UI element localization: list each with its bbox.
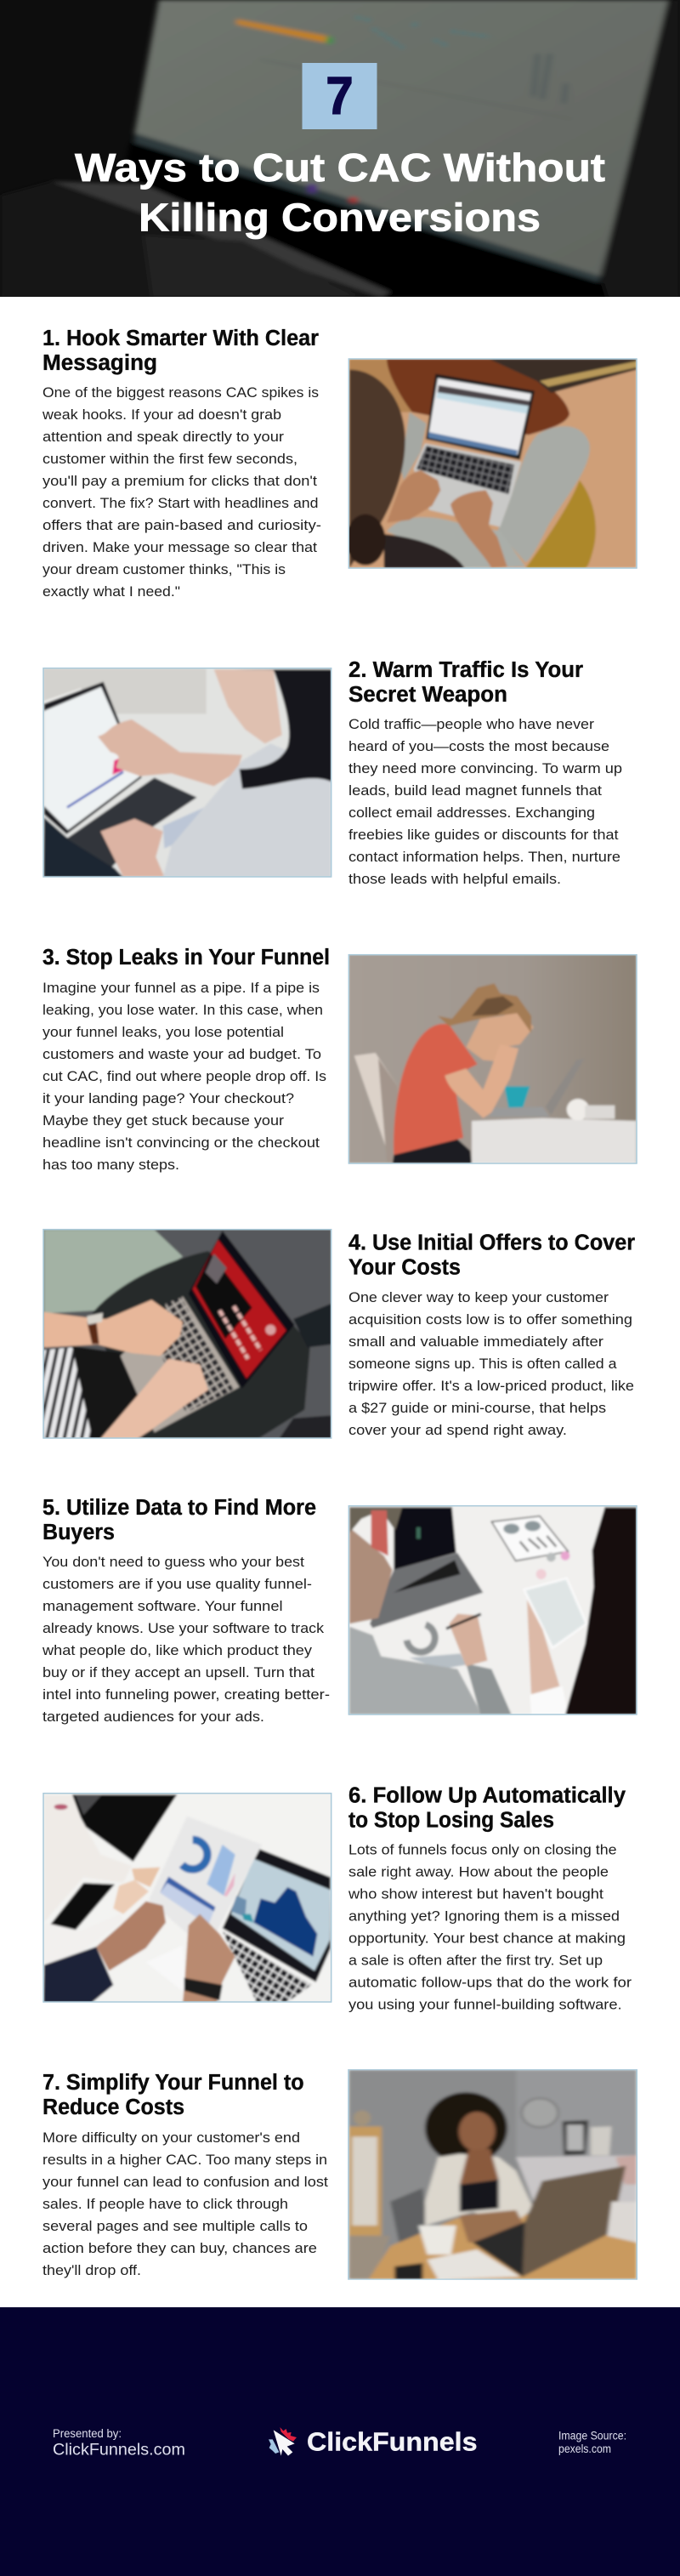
- body text: cover your ad spend right away.: [348, 1423, 567, 1438]
- body text: management software. Your funnel: [42, 1599, 283, 1614]
- heading: Your Costs: [348, 1255, 461, 1279]
- heading: [42, 327, 319, 375]
- body text: offers that are pain-based and curiosity-: [42, 518, 321, 533]
- body text: buy or if they accept an upsell. Turn that: [42, 1665, 314, 1680]
- body text: someone signs up. This is often called a: [348, 1356, 617, 1372]
- body text: Imagine your funnel as a pipe. If a pipe is: [42, 981, 320, 996]
- heading: 6. Follow Up Automatically: [348, 1784, 626, 1808]
- body text: it your landing page? Your checkout?: [42, 1091, 294, 1106]
- body text: [42, 2130, 328, 2278]
- title: [75, 145, 605, 240]
- heading: 2. Warm Traffic Is Your: [348, 658, 583, 682]
- body text: cut CAC, find out where people drop off. Is: [42, 1069, 326, 1084]
- body text: Maybe they get stuck because your: [42, 1113, 285, 1129]
- body text: [42, 385, 321, 600]
- heading: to Stop Losing Sales: [348, 1809, 554, 1833]
- body text: contact information helps. Then, nurture: [348, 850, 620, 865]
- body text: More difficulty on your customer's end: [42, 2130, 300, 2146]
- photo: woman using tablet with keyboard: [42, 668, 332, 878]
- body text: results in a higher CAC. Too many steps in: [42, 2152, 327, 2168]
- number 7 badge: [303, 63, 377, 129]
- heading: 5. Utilize Data to Find More: [42, 1496, 316, 1520]
- body text: freebies like guides or discounts for that: [348, 827, 619, 843]
- photo: woman using laptop on lap: [346, 359, 637, 568]
- body text: [348, 717, 622, 887]
- body text: [42, 1555, 330, 1725]
- body text: already knows. Use your software to track: [42, 1621, 325, 1636]
- ClickFunnels logo: ClickFunnels: [307, 2427, 478, 2456]
- photo: hands typing on laptop with red screen: [42, 1229, 332, 1439]
- body text: One of the biggest reasons CAC spikes is: [42, 385, 319, 401]
- title: Killing Conversions: [139, 196, 541, 240]
- body text: customers are if you use quality funnel-: [42, 1577, 312, 1592]
- body text: collect email addresses. Exchanging: [348, 805, 595, 821]
- body text: driven. Make your message so clear that: [42, 540, 317, 555]
- number 7 badge: 7: [326, 67, 354, 126]
- body text: what people do, like which product they: [42, 1643, 313, 1658]
- body text: weak hooks. If your ad doesn't grab: [42, 407, 281, 423]
- section 1: hook smarter: [42, 327, 637, 600]
- body text: automatic follow-ups that do the work for: [348, 1975, 632, 1990]
- body text: who show interest but haven't bought: [348, 1886, 604, 1902]
- body text: attention and speak directly to your: [42, 429, 285, 445]
- heading: [42, 1496, 316, 1544]
- body text: several pages and see multiple calls to: [42, 2219, 308, 2234]
- heading: 7. Simplify Your Funnel to: [42, 2071, 304, 2095]
- heading: Messaging: [42, 351, 157, 375]
- hero background photo: laptop with analytics dashboard: [0, 0, 680, 298]
- body text: customers and waste your ad budget. To: [42, 1047, 321, 1062]
- body text: heard of you—costs the most because: [348, 739, 609, 754]
- body text: small and valuable immediately after: [348, 1334, 604, 1350]
- heading: 3. Stop Leaks in Your Funnel: [42, 946, 330, 970]
- body text: those leads with helpful emails.: [348, 872, 561, 887]
- body text: has too many steps.: [42, 1157, 179, 1173]
- body text: [348, 1290, 634, 1438]
- body text: you'll pay a premium for clicks that don't: [42, 474, 317, 489]
- body text: customer within the first few seconds,: [42, 452, 298, 467]
- presented by credit: Presented by:: [53, 2427, 122, 2440]
- photo: stressed woman at laptop: [348, 954, 637, 1163]
- body text: You don't need to guess who your best: [42, 1555, 304, 1570]
- presented by credit: ClickFunnels.com: [53, 2441, 185, 2459]
- heading: [348, 1784, 626, 1833]
- presented by credit: [53, 2427, 185, 2459]
- body text: headline isn't convincing or the checkout: [42, 1135, 320, 1151]
- body text: your funnel leaks, you lose potential: [42, 1025, 284, 1040]
- body text: Cold traffic—people who have never: [348, 717, 595, 732]
- icon: cursor with starburst: [269, 2427, 297, 2456]
- body text: [348, 1842, 632, 2012]
- section 5: utilize data: [42, 1496, 637, 1725]
- heading: [348, 1231, 635, 1279]
- body text: they'll drop off.: [42, 2263, 141, 2278]
- photo: hands holding printed charts by laptop: [42, 1793, 332, 2003]
- section 6: follow up automatically: [42, 1784, 632, 2012]
- body text: sales. If people have to click through: [42, 2197, 288, 2212]
- heading: Buyers: [42, 1521, 115, 1544]
- image source credit: Image Source:: [558, 2429, 626, 2442]
- heading: [42, 2071, 304, 2119]
- body text: anything yet? Ignoring them is a missed: [348, 1908, 620, 1924]
- body text: they need more convincing. To warm up: [348, 761, 622, 776]
- body text: acquisition costs low is to offer something: [348, 1312, 632, 1328]
- body text: One clever way to keep your customer: [348, 1290, 609, 1305]
- body text: [42, 981, 326, 1173]
- footer: [0, 2307, 680, 2576]
- body text: targeted audiences for your ads.: [42, 1709, 264, 1725]
- heading: Secret Weapon: [348, 683, 507, 707]
- body text: action before they can buy, chances are: [42, 2241, 317, 2256]
- body text: leads, build lead magnet funnels that: [348, 783, 602, 799]
- image source credit: pexels.com: [558, 2442, 611, 2455]
- section 2: warm traffic: [42, 658, 622, 887]
- heading: 1. Hook Smarter With Clear: [42, 327, 319, 350]
- heading: [348, 658, 583, 707]
- body text: convert. The fix? Start with headlines and: [42, 496, 318, 511]
- body text: a sale is often after the first try. Set up: [348, 1953, 603, 1968]
- body text: tripwire offer. It's a low-priced product, like: [348, 1379, 634, 1394]
- section 7: simplify funnel: [42, 2069, 637, 2279]
- section 3: stop leaks: [42, 946, 637, 1173]
- body text: your dream customer thinks, "This is: [42, 562, 286, 577]
- photo: two people reviewing charts at desk: [348, 1505, 637, 1714]
- title: Ways to Cut CAC Without: [75, 145, 605, 190]
- body text: leaking, you lose water. In this case, when: [42, 1003, 323, 1018]
- body text: a $27 guide or mini-course, that helps: [348, 1401, 606, 1416]
- body text: intel into funneling power, creating better-: [42, 1687, 330, 1703]
- image source credit: [558, 2429, 626, 2455]
- body text: you using your funnel-building software.: [348, 1997, 622, 2012]
- heading: Reduce Costs: [42, 2095, 184, 2119]
- hero banner: [0, 0, 680, 298]
- body text: Lots of funnels focus only on closing the: [348, 1842, 617, 1857]
- body text: exactly what I need.": [42, 584, 180, 600]
- body text: sale right away. How about the people: [348, 1864, 609, 1879]
- body text: opportunity. Your best chance at making: [348, 1931, 626, 1946]
- heading: 4. Use Initial Offers to Cover: [348, 1231, 635, 1255]
- photo: smiling woman at laptop with coffee: [348, 2069, 637, 2279]
- body text: your funnel can lead to confusion and lost: [42, 2175, 328, 2190]
- section 4: initial offers: [42, 1229, 635, 1439]
